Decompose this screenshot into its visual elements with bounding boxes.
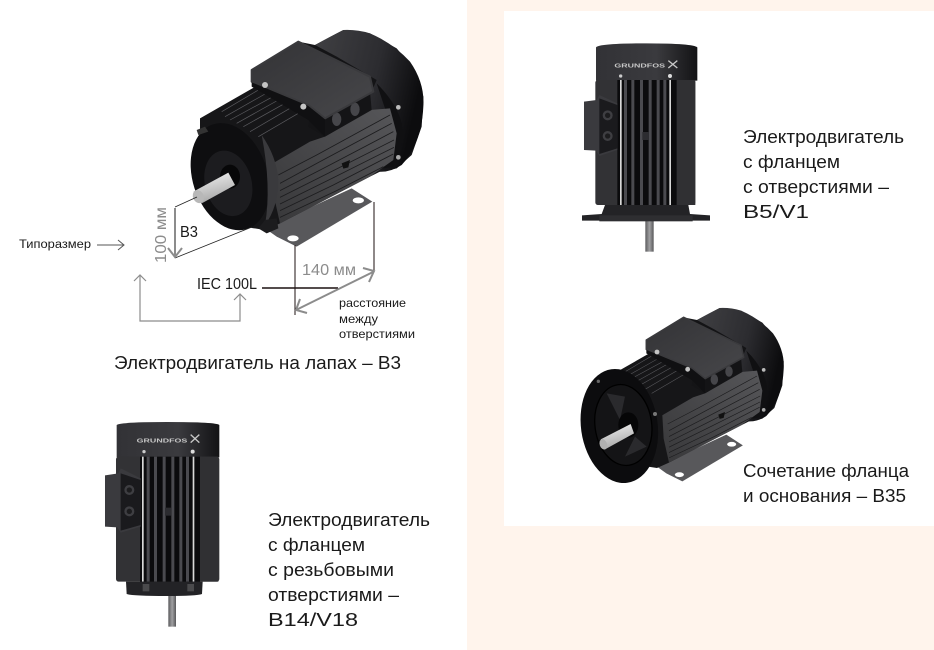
- caption: B14/V18: с фланцем: [268, 535, 365, 555]
- motor illustration: foot mounted B3: [177, 30, 423, 247]
- mounting flange: [582, 205, 710, 221]
- front end shield: [177, 113, 283, 241]
- caption: B35: и основания – B35: [743, 486, 906, 506]
- foot plate: [265, 188, 372, 247]
- brand: GRUNDFOS: [614, 63, 665, 69]
- shaft: [645, 220, 654, 252]
- caption: B5/V1: Электродвигатель: [743, 127, 904, 147]
- label: 100 mm: 100 мм: [153, 207, 170, 263]
- page background: peach column: [467, 0, 934, 650]
- label: B3: B3: [180, 224, 198, 241]
- label: distance between holes: между: [339, 312, 378, 326]
- motor illustration: threaded flange B14/V18: [105, 422, 219, 627]
- caption: B35: [743, 461, 910, 506]
- cooling fins: [617, 80, 677, 208]
- cooling fins: [140, 457, 200, 583]
- caption: B3: Электродвигатель на лапах – B3: [114, 353, 401, 373]
- arrow: gray bracket connector: [134, 275, 246, 321]
- shaft: [168, 595, 176, 627]
- fan cover: [117, 422, 219, 457]
- label: 140 mm: 140 мм: [302, 262, 356, 279]
- label: distance between holes: расстояние: [339, 296, 406, 310]
- dimension: shaft height leader lines: [175, 197, 252, 258]
- fan cover: [596, 43, 697, 81]
- shaft: [193, 173, 235, 203]
- motor body: [595, 80, 695, 205]
- B35 flange: [573, 364, 665, 488]
- motor illustration: flange with holes B5/V1: [582, 43, 710, 252]
- caption: B35: Сочетание фланца: [743, 461, 910, 481]
- caption: B14/V18: B14/V18: [268, 610, 358, 630]
- caption: B14/V18: [268, 510, 430, 630]
- caption: B5/V1: с фланцем: [743, 152, 840, 172]
- label: frame size: Типоразмер: [19, 239, 91, 251]
- label: distance between holes: [339, 296, 415, 341]
- panel: white card on the right: [504, 11, 934, 526]
- flange base: [126, 582, 203, 596]
- caption: B5/V1: B5/V1: [743, 202, 809, 222]
- dimension: gray 100 mm arrow: [168, 208, 182, 257]
- motor illustration: combined flange and foot B35: [605, 308, 784, 481]
- label: IEC 100L: IEC 100L: [197, 276, 257, 293]
- label: distance between holes: отверстиями: [339, 327, 415, 341]
- caption: B14/V18: отверстиями –: [268, 585, 399, 605]
- terminal box: [105, 468, 141, 533]
- caption: B5/V1: [743, 127, 904, 222]
- motor body: [116, 457, 219, 582]
- dimension: gray 140 mm arrow: [296, 268, 374, 313]
- dimension: black lines: [262, 202, 374, 315]
- terminal box: [584, 95, 617, 156]
- caption: B14/V18: с резьбовыми: [268, 560, 394, 580]
- foot plate: [657, 435, 743, 481]
- brand: GRUNDFOS: [137, 439, 188, 445]
- arrow: frame size pointer: [97, 240, 124, 250]
- caption: B14/V18: Электродвигатель: [268, 510, 430, 530]
- caption: B5/V1: с отверстиями –: [743, 177, 889, 197]
